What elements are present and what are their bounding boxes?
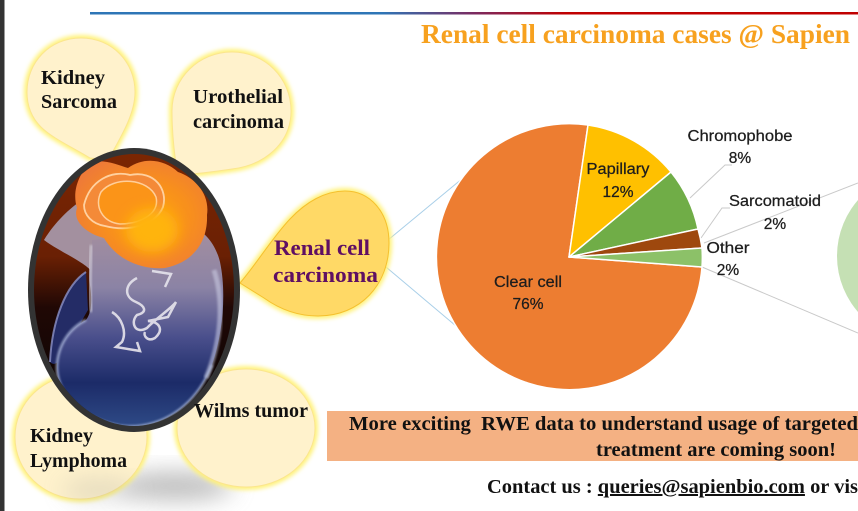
- pie labels: 2%: [717, 262, 739, 279]
- slice: chromophobe: [569, 172, 698, 257]
- connector lines to pie: [386, 178, 463, 326]
- bubble: Kidney Sarcoma: [27, 38, 135, 160]
- bubble: Renal cell carcinoma: Renal cell: [274, 235, 370, 260]
- slice: papillary: [569, 125, 671, 257]
- bubble: Kidney Lymphoma: Kidney: [30, 425, 94, 447]
- bubble: Kidney Sarcoma: Kidney: [41, 67, 106, 89]
- pie labels: Chromophobe: [688, 128, 792, 145]
- pie labels: Clear cell: [494, 274, 562, 291]
- bubble: Kidney Lymphoma: Lymphoma: [30, 450, 127, 472]
- shadow under kidney image: [117, 472, 233, 500]
- callout lines from pie to second chart: [690, 165, 858, 333]
- pie labels: 12%: [602, 184, 634, 201]
- lavender upper structure: [44, 204, 104, 270]
- back lobe: [50, 272, 88, 364]
- bubble: Renal cell carcinoma: carcinoma: [273, 262, 378, 287]
- pie labels: 2%: [764, 216, 786, 233]
- pie labels: 8%: [729, 150, 751, 167]
- kidney illustration in oval frame: [28, 148, 240, 433]
- kidney body: [57, 228, 223, 426]
- pie labels: Other: [706, 240, 750, 257]
- bubble: Urothelial carcinoma: carcinoma: [193, 111, 284, 133]
- banner: More exciting RWE data to understand usage of targeted: [349, 413, 858, 435]
- calyces: [112, 271, 176, 351]
- bubble: Renal cell carcinoma: [240, 191, 389, 316]
- banner: treatment are coming soon!: [596, 439, 836, 461]
- tumour: [75, 161, 207, 268]
- Wilms tumor label: Wilms tumor: [194, 400, 308, 422]
- left window edge: [0, 0, 4, 511]
- bubble: Urothelial carcinoma: Urothelial: [193, 86, 283, 108]
- pie labels: 76%: [512, 296, 544, 313]
- slice: other: [569, 248, 702, 267]
- bubble: Wilms tumor: [177, 369, 315, 487]
- bubble: Kidney Lymphoma: [15, 375, 147, 500]
- second pie partial: [837, 171, 858, 341]
- bubble: Kidney Sarcoma: Sarcoma: [41, 91, 117, 113]
- pie labels: [494, 128, 821, 313]
- pie labels: Sarcomatoid: [729, 193, 821, 210]
- top rule: [90, 12, 858, 14]
- bubble: Urothelial carcinoma: [172, 52, 291, 175]
- title: Renal cell carcinoma cases @ Sapien: [421, 18, 850, 49]
- slice: clear cell: [436, 124, 702, 390]
- pie chart: [436, 124, 702, 390]
- slice: sarcomatoid: [569, 229, 702, 257]
- contact line: Contact us : queries@sapienbio.com or vis: [487, 476, 858, 498]
- banner: [327, 411, 858, 461]
- pie labels: Papillary: [586, 161, 650, 178]
